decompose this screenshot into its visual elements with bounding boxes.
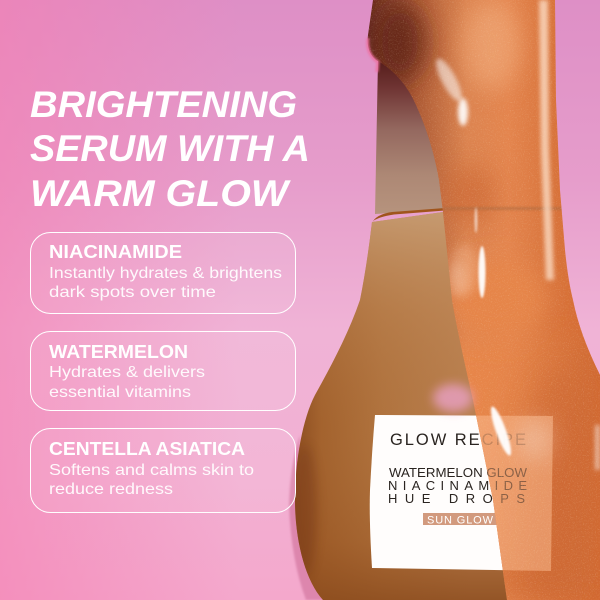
right edge strip [539, 0, 554, 280]
title [30, 84, 310, 214]
product: serum bottle [289, 0, 600, 600]
title: WARM GLOW [30, 173, 291, 214]
glossy highlights [432, 56, 515, 457]
label seen through serum [476, 416, 553, 571]
label product name [388, 465, 532, 506]
title: SERUM WITH A [30, 128, 310, 169]
pink reflection [433, 384, 473, 412]
card: centella asiatica: CENTELLA ASIATICA [49, 439, 245, 459]
serum ribbon: GLOW RECIPE [390, 431, 526, 449]
bottle body [295, 212, 507, 600]
rim highlight [368, 38, 378, 72]
label brand: GLOW RECIPE [390, 431, 526, 449]
serum ribbon: NIACINAMIDE [388, 478, 527, 493]
label product name: HUE DROPS [388, 491, 525, 506]
card: centella asiatica [30, 428, 296, 512]
neck collar line [373, 208, 445, 221]
title: BRIGHTENING [30, 84, 297, 125]
card: niacinamide [30, 232, 296, 314]
bottle neck [375, 60, 446, 214]
label product name: TM [526, 492, 532, 497]
card: niacinamide: dark spots over time [49, 284, 216, 301]
card: niacinamide: NIACINAMIDE [49, 242, 182, 262]
bottle pink edge reflection [289, 435, 330, 600]
sparkle texture [365, 0, 600, 600]
label [370, 415, 553, 571]
card: watermelon: Hydrates & delivers [49, 364, 205, 381]
card: watermelon: WATERMELON [49, 342, 188, 362]
card: watermelon [30, 332, 296, 410]
collar seen through serum [443, 207, 568, 210]
card: niacinamide: Instantly hydrates & brightens [49, 265, 282, 282]
label product name: NIACINAMIDE [388, 478, 527, 493]
label shade tag: SUN GLOW [427, 514, 494, 526]
lower ribbon tone [445, 340, 600, 600]
card: watermelon: essential vitamins [49, 384, 191, 401]
serum ribbon: WATERMELON GLOW [389, 465, 528, 480]
serum ribbon [365, 0, 600, 600]
card: centella asiatica: reduce redness [49, 481, 173, 498]
serum ribbon: HUE DROPS [388, 491, 525, 506]
label product name: WATERMELON GLOW [389, 465, 528, 480]
card: centella asiatica: Softens and calms skin to [49, 462, 254, 479]
